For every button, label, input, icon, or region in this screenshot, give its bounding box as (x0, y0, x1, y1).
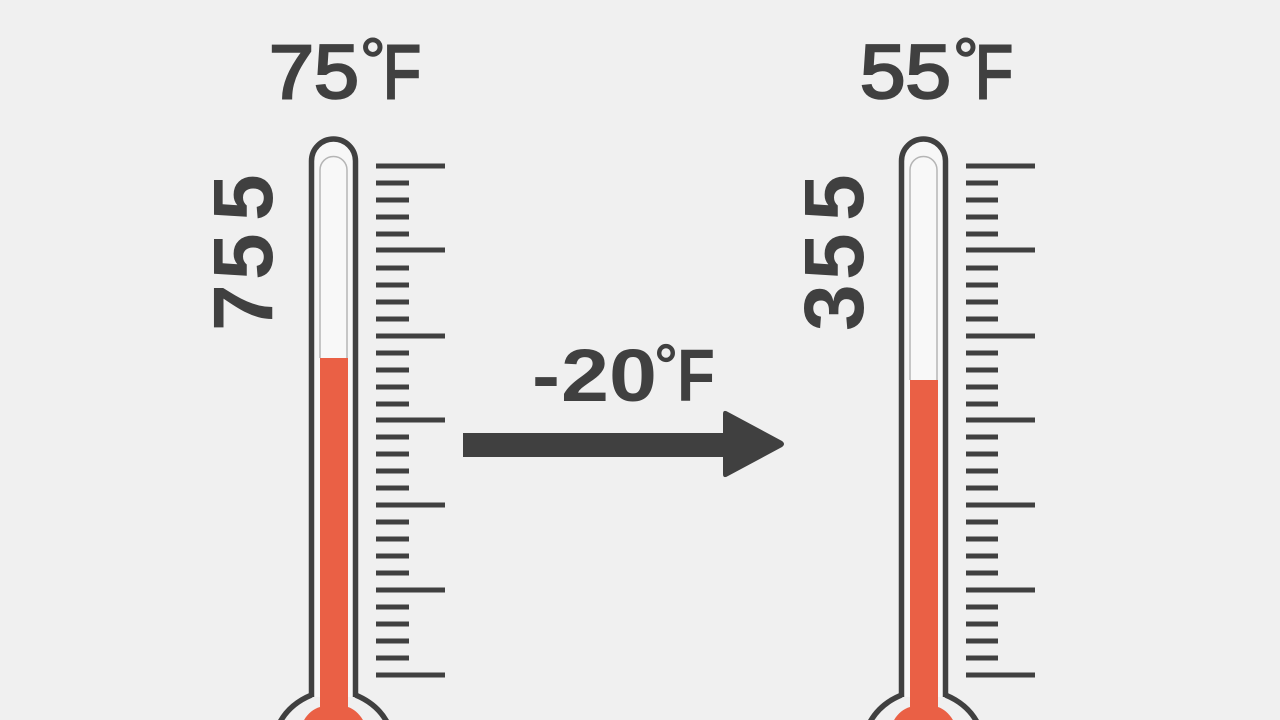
label: -20°F: 20 (561, 334, 657, 417)
heading: 55°F: ° (953, 25, 979, 97)
right thermometer mercury column (893, 380, 954, 720)
label: -20°F: - (532, 334, 560, 417)
right thermometer bulb outline (869, 695, 978, 720)
heading: 75°F: 75 (269, 30, 359, 115)
rotated label: 355: 355 (787, 174, 881, 331)
label: -20°F: F (677, 334, 715, 417)
left thermometer mercury column (303, 358, 364, 720)
arrow: temperature decrease (463, 411, 784, 477)
thermometer: left, 75°F (279, 139, 388, 720)
label: -20°F: ° (654, 333, 678, 400)
left thermometer inner tube (320, 156, 347, 358)
heading: 55°F (860, 25, 1013, 115)
heading: 55°F: F (975, 30, 1013, 115)
left thermometer bulb outline (279, 695, 388, 720)
rotated label: 755: 755 (196, 174, 290, 331)
heading: 55°F: 55 (860, 30, 951, 115)
heading: 75°F (269, 25, 421, 115)
scale ticks: right (966, 166, 1035, 675)
thermometer: right, 55°F (869, 139, 978, 720)
heading: 75°F: F (383, 30, 421, 115)
scale ticks: left (376, 166, 445, 675)
heading: 75°F: ° (360, 25, 386, 97)
right thermometer inner tube (910, 156, 937, 380)
label: -20°F (532, 333, 715, 417)
